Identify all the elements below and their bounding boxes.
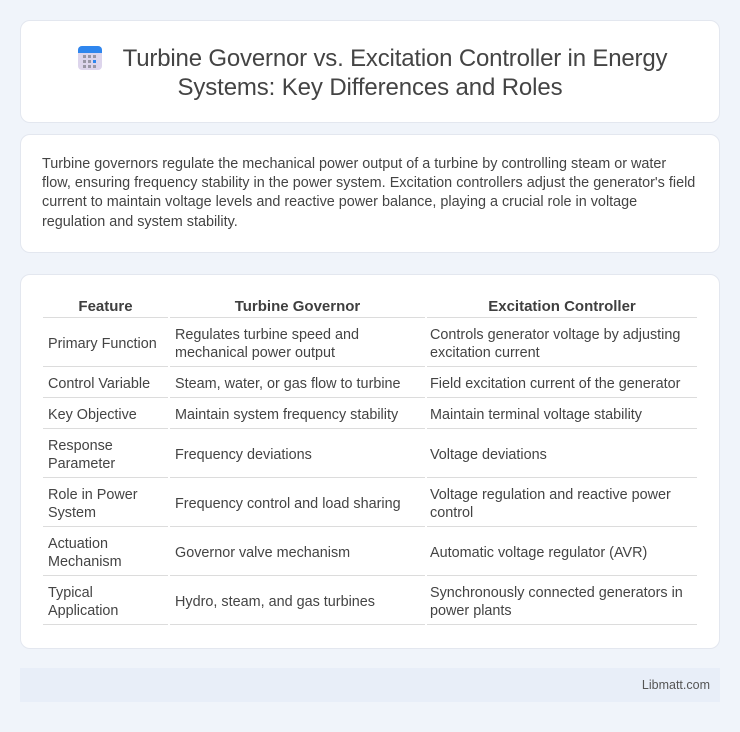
row: Actuation Mechanism: Mechanism	[48, 554, 122, 570]
row: Response Parameter: Parameter	[48, 456, 115, 472]
row: Actuation Mechanism	[48, 536, 647, 570]
row: Key Objective: Maintain terminal voltage stability	[430, 407, 642, 423]
panel: comparison table	[20, 274, 720, 649]
row: Role in Power System: System	[48, 505, 96, 521]
title: Turbine Governor vs. Excitation Controller in Energy	[123, 45, 667, 72]
row: Role in Power System	[48, 487, 671, 521]
row: Typical Application: Application	[48, 603, 118, 619]
footer bar	[20, 668, 720, 702]
row: Key Objective	[48, 407, 642, 423]
icon: calendar	[78, 46, 102, 70]
row: Typical Application: Synchronously connected generators in	[430, 585, 683, 601]
row: Typical Application: Hydro, steam, and gas turbines	[175, 594, 375, 610]
row: Control Variable	[48, 376, 680, 392]
panel: header	[20, 20, 720, 123]
table header: Excitation Controller	[488, 298, 636, 315]
text block: intro	[42, 156, 695, 230]
row: Response Parameter: Response	[48, 438, 113, 454]
row: Response Parameter	[48, 438, 547, 472]
row: Key Objective: Maintain system frequency stability	[175, 407, 398, 423]
comparison table	[43, 298, 697, 625]
title	[123, 45, 668, 101]
panel: intro text	[20, 134, 720, 253]
row: Response Parameter: Voltage deviations	[430, 447, 547, 463]
table header: Feature	[78, 298, 133, 315]
row: Typical Application: Typical	[48, 585, 93, 601]
row: Role in Power System: Role in Power	[48, 487, 138, 503]
row: Primary Function: mechanical power output	[175, 345, 335, 361]
text block: intro: flow, ensuring frequency stability in the power system. Excitation controllers adjust the generator's field	[42, 175, 695, 191]
row: Primary Function: excitation current	[430, 345, 540, 361]
row: Primary Function: Primary Function	[48, 336, 157, 352]
table header	[78, 298, 636, 315]
row: Role in Power System: control	[430, 505, 473, 521]
row: Response Parameter: Frequency deviations	[175, 447, 312, 463]
table header: Turbine Governor	[235, 298, 360, 315]
row: Role in Power System: Frequency control and load sharing	[175, 496, 401, 512]
text block: intro: current to maintain voltage levels and reactive power balance, playing a crucial role in voltage	[42, 194, 637, 210]
row: Primary Function: Regulates turbine speed and	[175, 327, 359, 343]
row: Role in Power System: Voltage regulation and reactive power	[430, 487, 671, 503]
row: Actuation Mechanism: Actuation	[48, 536, 108, 552]
row: Typical Application: power plants	[430, 603, 512, 619]
row: Actuation Mechanism: Governor valve mechanism	[175, 545, 350, 561]
row: Actuation Mechanism: Automatic voltage regulator (AVR)	[430, 545, 647, 561]
row: Control Variable: Control Variable	[48, 376, 150, 392]
row: Primary Function	[48, 327, 680, 361]
row: Typical Application	[48, 585, 683, 619]
footer text: Libmatt.com	[642, 678, 710, 692]
row: Key Objective: Key Objective	[48, 407, 137, 423]
text block: intro: Turbine governors regulate the mechanical power output of a turbine by controlling steam or water	[42, 156, 666, 172]
title: Systems: Key Differences and Roles	[178, 74, 562, 101]
row: Control Variable: Steam, water, or gas flow to turbine	[175, 376, 401, 392]
text block: intro: regulation and system stability.	[42, 214, 238, 230]
row: Control Variable: Field excitation current of the generator	[430, 376, 680, 392]
row: Primary Function: Controls generator voltage by adjusting	[430, 327, 680, 343]
